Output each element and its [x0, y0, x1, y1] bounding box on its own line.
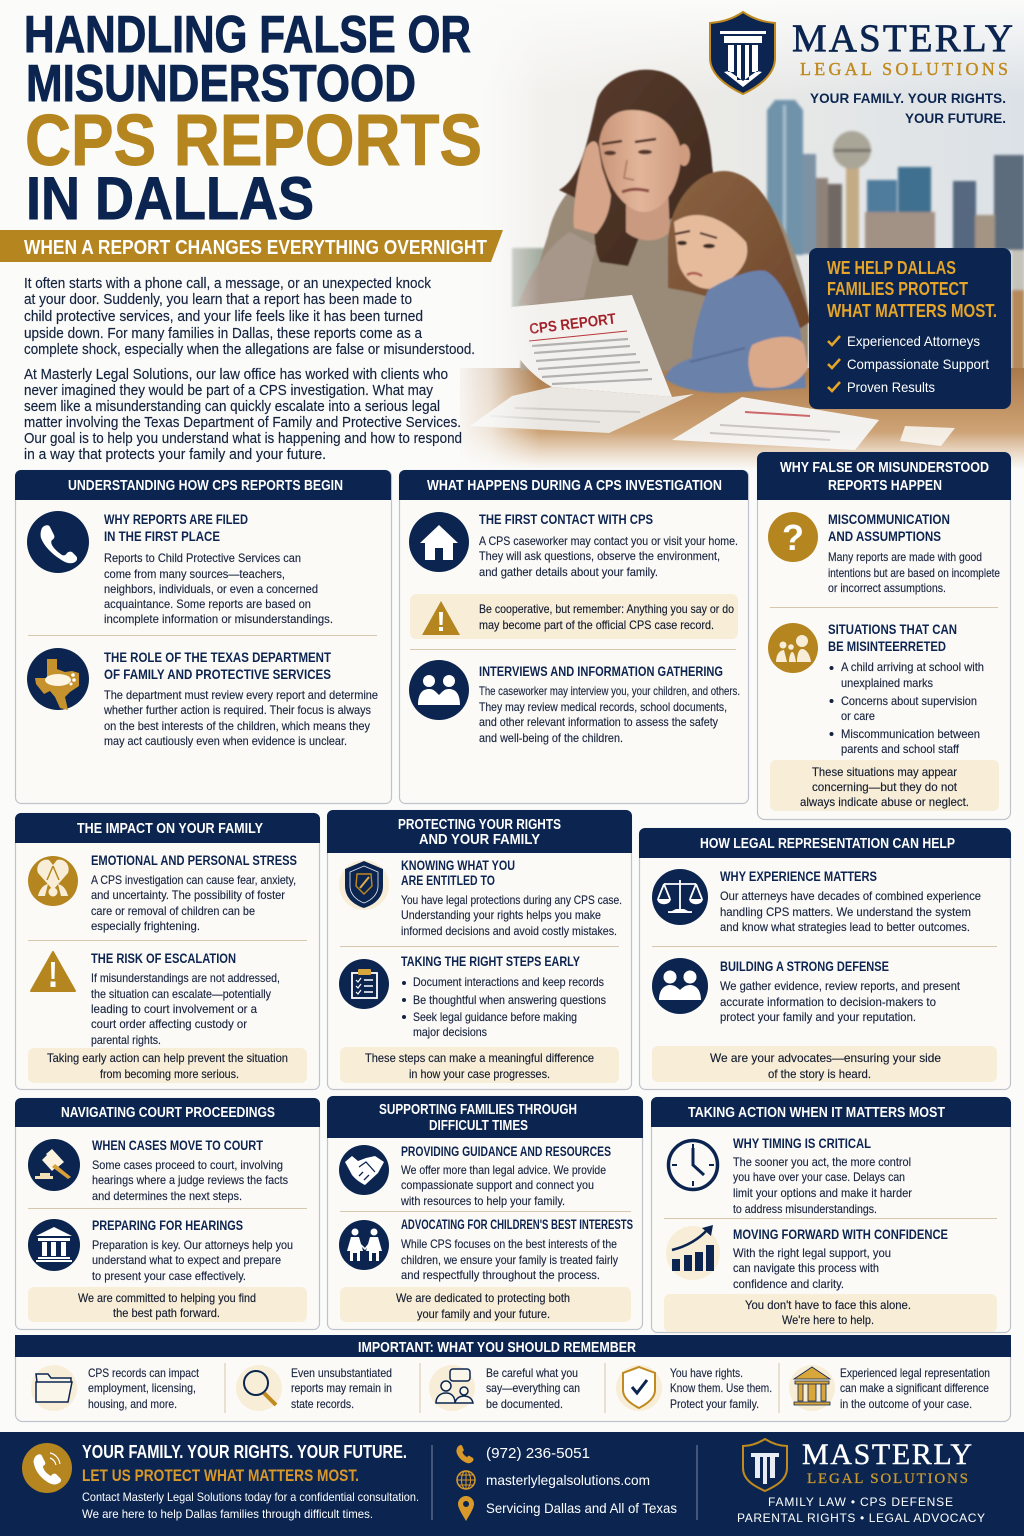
panel: navigating court proceedings: WHEN CASES MOVE TO COURT: [92, 1138, 264, 1153]
icon: parent and child: [339, 1220, 389, 1270]
footer call to action: We are here to help Dallas families through difficult times.: [82, 1507, 373, 1521]
callout: dedicated to protecting: your family and your future.: [417, 1307, 550, 1321]
intro paragraph 1: at your door. Suddenly, you learn that a report has been made to: [24, 292, 412, 308]
tagline: YOUR FAMILY. YOUR RIGHTS.: [810, 91, 1006, 106]
icon: handshake: [339, 1145, 389, 1195]
tagline: [810, 91, 1006, 126]
panel: understanding how CPS reports begin: [15, 470, 392, 804]
reminder: CPS records: [31, 1365, 200, 1411]
callout: be cooperative: Be cooperative, but remember: Anything you say or do: [479, 602, 734, 616]
reminder: careful what you say: Be careful what you: [486, 1366, 578, 1380]
panel: protecting your rights and your family: ARE ENTITLED TO: [401, 873, 495, 888]
intro paragraph 2: seem like a misunderstanding can quickly escalate into a serious legal: [24, 399, 440, 415]
panel: what happens during a CPS investigation: The caseworker may interview you, your children, and others.: [479, 684, 740, 698]
reminder: legal representation: can make a significant difference: [840, 1381, 989, 1395]
panel: supporting families through difficult times: and respectfully throughout the process.: [401, 1268, 600, 1282]
contact details: masterlylegalsolutions.com: [486, 1472, 650, 1488]
callout: we help Dallas families: FAMILIES PROTECT: [827, 279, 968, 299]
ribbon subtitle: WHEN A REPORT CHANGES EVERYTHING OVERNIGHT: [24, 236, 487, 259]
panel: navigating court proceedings: PREPARING FOR HEARINGS: [92, 1218, 243, 1233]
callout: you don't have to face this alone: [664, 1294, 997, 1332]
callout: be cooperative: may become part of the official CPS case record.: [479, 618, 714, 632]
panel: protecting your rights and your family: AND YOUR FAMILY: [419, 832, 540, 848]
reminder: careful what you say: say—everything can: [486, 1381, 580, 1395]
panel: how legal representation can help: handling CPS matters. We understand the system: [720, 905, 971, 919]
panel: understanding how CPS reports begin: acquaintance. Some reports are based on: [104, 597, 311, 611]
callout: be cooperative: [410, 594, 738, 639]
callout: we help Dallas families: Compassionate Support: [847, 356, 989, 372]
reminder: legal representation: Experienced legal representation: [840, 1366, 990, 1380]
reminder: you have rights: [616, 1365, 772, 1411]
reminder: careful what you say: [429, 1365, 580, 1411]
intro paragraph 2: matter involving the Texas Department of Family and Protective Services.: [24, 415, 461, 431]
panel: taking action when it matters most: MOVING FORWARD WITH CONFIDENCE: [733, 1227, 948, 1242]
intro paragraph 1: upside down. For many families in Dallas, these reports come as a: [24, 326, 422, 342]
icon: gavel: [28, 1139, 80, 1191]
panel: the impact on your family: If misunderstandings are not addressed,: [91, 971, 280, 985]
icon: people defense: [652, 958, 708, 1014]
panel: navigating court proceedings: understand what to expect and prepare: [92, 1253, 281, 1267]
panel: the impact on your family: EMOTIONAL AND PERSONAL STRESS: [91, 853, 297, 868]
callout: committed to helping: [28, 1287, 307, 1322]
panel: taking action when it matters most: limit your options and make it harder: [733, 1186, 912, 1200]
panel: how legal representation can help: [639, 828, 1011, 1090]
hand: [574, 141, 611, 234]
icon: people interview: [409, 660, 469, 720]
panel: supporting families through difficult times: We offer more than legal advice. We provide: [401, 1163, 606, 1177]
icon: rising chart: [666, 1225, 720, 1280]
footer logo: LEGAL SOLUTIONS: [807, 1471, 968, 1487]
face: [599, 110, 681, 212]
panel: understanding how CPS reports begin: OF FAMILY AND PROTECTIVE SERVICES: [104, 667, 331, 682]
panel: protecting your rights and your family: TAKING THE RIGHT STEPS EARLY: [401, 954, 580, 969]
child face: [674, 215, 747, 289]
panel: taking action when it matters most: can navigate this process with: [733, 1261, 879, 1275]
panel: the impact on your family: and uncertainty. The possibility of foster: [91, 888, 285, 902]
callout: situations may appear concerning: These situations may appear: [812, 765, 957, 779]
panel: the impact on your family: the situation can escalate—potentially: [91, 987, 271, 1001]
panel: taking action when it matters most: With the right legal support, you: [733, 1246, 891, 1260]
footer logo: PARENTAL RIGHTS • LEGAL ADVOCACY: [737, 1511, 985, 1525]
callout: committed to helping: We are committed to helping you find: [78, 1291, 256, 1305]
tagline: YOUR FUTURE.: [905, 111, 1006, 126]
callout: meaningful difference: [340, 1047, 619, 1083]
callout: we help Dallas families: [809, 248, 1011, 409]
reminder: legal representation: [789, 1365, 990, 1411]
panel: why false or misunderstood reports happen: SITUATIONS THAT CAN: [828, 622, 957, 637]
icon: scales of justice: [652, 869, 708, 925]
panel: why false or misunderstood reports happen: or incorrect assumptions.: [828, 581, 946, 595]
panel: navigating court proceedings: Preparation is key. Our attorneys help you: [92, 1238, 293, 1252]
reminder: unsubstantiated reports: reports may remain in: [291, 1381, 392, 1395]
panel: what happens during a CPS investigation: A CPS caseworker may contact you or visit your home.: [479, 534, 738, 548]
panel: navigating court proceedings: and determines the next steps.: [92, 1189, 242, 1203]
panel: the impact on your family: THE RISK OF ESCALATION: [91, 951, 236, 966]
footer call to action: YOUR FAMILY. YOUR RIGHTS. YOUR FUTURE.: [82, 1442, 407, 1462]
intro paragraph 2: [24, 367, 462, 463]
panel: supporting families through difficult times: with resources to help your family.: [400, 1194, 565, 1208]
panel: the impact on your family: THE IMPACT ON YOUR FAMILY: [77, 821, 263, 837]
reminder: unsubstantiated reports: state records.: [291, 1397, 354, 1411]
icon: family silhouettes: [768, 623, 818, 673]
panel: how legal representation can help: protect your family and your reputation.: [720, 1010, 916, 1024]
panel: protecting your rights and your family: Understanding your rights helps you make: [401, 908, 601, 922]
intro paragraph 2: At Masterly Legal Solutions, our law office has worked with clients who: [24, 367, 448, 383]
icon: clock: [668, 1140, 718, 1190]
panel: protecting your rights and your family: Be thoughtful when answering questions: [413, 993, 606, 1007]
icon: question mark: [768, 512, 818, 562]
panel: understanding how CPS reports begin: come from many sources—teachers,: [104, 567, 285, 581]
footer call to action: Contact Masterly Legal Solutions today for a confidential consultation.: [82, 1490, 419, 1504]
callout: situations may appear concerning: [770, 760, 999, 811]
callout: your advocates: [652, 1046, 997, 1082]
icon: shield: [339, 860, 389, 910]
panel: taking action when it matters most: TAKING ACTION WHEN IT MATTERS MOST: [688, 1105, 945, 1121]
callout: you don't have to face this alone: We're here to help.: [782, 1313, 874, 1327]
panel: why false or misunderstood reports happen: A child arriving at school with: [841, 660, 984, 674]
panel: protecting your rights and your family: [327, 810, 632, 1090]
panel: why false or misunderstood reports happen: Many reports are made with good: [828, 550, 982, 564]
panel: understanding how CPS reports begin: Reports to Child Protective Services can: [104, 551, 301, 565]
panel: the impact on your family: especially frightening.: [91, 919, 200, 933]
panel: how legal representation can help: accurate information to decision-makers to: [720, 995, 936, 1009]
intro paragraph 1: It often starts with a phone call, a message, or an unexpected knock: [24, 276, 432, 292]
panel: why false or misunderstood reports happen: WHY FALSE OR MISUNDERSTOOD: [780, 460, 989, 476]
panel: understanding how CPS reports begin: whether further action is required. Their focus is always: [103, 703, 371, 717]
callout: we help Dallas families: Proven Results: [847, 379, 935, 395]
ribbon subtitle: [0, 230, 503, 262]
panel: understanding how CPS reports begin: WHY REPORTS ARE FILED: [104, 512, 248, 527]
icon: broken heart family: [28, 856, 78, 906]
panel: understanding how CPS reports begin: IN THE FIRST PLACE: [104, 529, 220, 544]
panel: why false or misunderstood reports happen: BE MISINTEERRETED: [828, 639, 946, 654]
panel: protecting your rights and your family: Seek legal guidance before making: [413, 1010, 577, 1024]
callout: committed to helping: the best path forward.: [113, 1306, 220, 1320]
panel: supporting families through difficult times: compassionate support and connect you: [401, 1178, 594, 1192]
panel: supporting families through difficult times: children, we ensure your family is treated fairly: [401, 1253, 618, 1267]
footer logo: FAMILY LAW • CPS DEFENSE: [768, 1495, 953, 1509]
hair behind: [559, 70, 716, 266]
panel: understanding how CPS reports begin: The department must review every report and determine: [104, 688, 378, 702]
panel: how legal representation can help: WHY EXPERIENCE MATTERS: [720, 869, 877, 884]
panel: understanding how CPS reports begin: on the best interests of the children, which means they: [104, 719, 370, 733]
panel: taking action when it matters most: [651, 1097, 1011, 1332]
title: IN DALLAS: [26, 165, 314, 232]
panel: supporting families through difficult times: [327, 1096, 643, 1330]
logo: Masterly Legal Solutions: LEGAL SOLUTIONS: [800, 59, 1008, 79]
callout: your advocates: We are your advocates—ensuring your side: [710, 1051, 941, 1065]
panel: why false or misunderstood reports happen: AND ASSUMPTIONS: [828, 529, 941, 544]
title: MISUNDERSTOOD: [26, 55, 416, 113]
panel: what happens during a CPS investigation: and gather details about your family.: [479, 565, 658, 579]
panel: how legal representation can help: HOW LEGAL REPRESENTATION CAN HELP: [700, 836, 955, 852]
panel: protecting your rights and your family: PROTECTING YOUR RIGHTS: [398, 817, 561, 833]
panel: important, what you should remember: [15, 1335, 1011, 1422]
intro paragraph 2: never imagined they would be part of a CPS investigation. What may: [24, 383, 434, 399]
child shirt: [665, 271, 806, 393]
contact details: Servicing Dallas and All of Texas: [486, 1500, 677, 1516]
icon: phone: [27, 511, 89, 573]
panel: the impact on your family: A CPS investigation can cause fear, anxiety,: [91, 873, 296, 887]
sleeve: [518, 232, 596, 305]
panel: supporting families through difficult times: DIFFICULT TIMES: [429, 1118, 528, 1134]
callout: dedicated to protecting: We are dedicated to protecting both: [396, 1291, 570, 1305]
icon: warning triangle: [31, 952, 75, 991]
callout: meaningful difference: These steps can make a meaningful difference: [365, 1051, 594, 1065]
footer call to action: [82, 1442, 419, 1521]
panel: how legal representation can help: Our atterneys have decades of combined experience: [720, 889, 981, 903]
panel: supporting families through difficult times: While CPS focuses on the best interests of the: [401, 1237, 617, 1251]
panel: the impact on your family: court order affecting custody or: [91, 1017, 247, 1031]
panel: supporting families through difficult times: SUPPORTING FAMILIES THROUGH: [379, 1102, 577, 1118]
footer: [0, 1432, 1024, 1536]
panel: navigating court proceedings: Some cases proceed to court, involving: [92, 1158, 283, 1172]
intro paragraph 1: child protective services, and your life feels like it has been turned: [24, 309, 423, 325]
reminder: CPS records: housing, and more.: [88, 1397, 177, 1411]
reminder: you have rights: Know them. Use them.: [670, 1381, 772, 1395]
icon: clipboard checklist: [339, 959, 389, 1009]
panel: understanding how CPS reports begin: incomplete information or misunderstandings.: [104, 612, 333, 626]
panel: protecting your rights and your family: KNOWING WHAT YOU: [401, 858, 515, 873]
panel: what happens during a CPS investigation: [399, 470, 748, 804]
panel: what happens during a CPS investigation: They will ask questions, observe the environment,: [479, 549, 720, 563]
panel: what happens during a CPS investigation: WHAT HAPPENS DURING A CPS INVESTIGATION: [427, 478, 722, 494]
reminder: CPS records: CPS records can impact: [88, 1366, 200, 1380]
hero photo: mother and child on the phone with a CPS report and Dallas skyline: [450, 0, 1024, 470]
reminder: careful what you say: be documented.: [486, 1397, 563, 1411]
panel: supporting families through difficult times: ADVOCATING FOR CHILDREN'S BEST INTERESTS: [401, 1217, 633, 1232]
panel: the impact on your family: parental rights.: [91, 1033, 161, 1047]
panel: what happens during a CPS investigation: INTERVIEWS AND INFORMATION GATHERING: [479, 664, 723, 679]
panel: why false or misunderstood reports happen: MISCOMMUNICATION: [828, 512, 950, 527]
panel: understanding how CPS reports begin: neighbors, individuals, or even a concerned: [104, 582, 318, 596]
logo: Masterly Legal Solutions: [710, 12, 1013, 94]
callout: early action: [28, 1048, 307, 1083]
icon: question mark: ?: [782, 517, 804, 558]
neck: [626, 190, 670, 240]
intro paragraph 2: in a way that protects your family and your future.: [24, 447, 326, 463]
panel: taking action when it matters most: to address misunderstandings.: [733, 1202, 877, 1216]
sweater: [520, 180, 808, 372]
mother hand: [748, 337, 808, 388]
panel: the impact on your family: leading to court involvement or a: [91, 1002, 257, 1016]
child hair: [668, 171, 810, 335]
callout: we help Dallas families: Experienced Attorneys: [847, 333, 980, 349]
panel: important, what you should remember: IMPORTANT: WHAT YOU SHOULD REMEMBER: [358, 1340, 636, 1356]
callout: situations may appear concerning: always indicate abuse or neglect.: [800, 795, 969, 809]
callout: early action: Taking early action can help prevent the situation: [47, 1051, 288, 1065]
panel: protecting your rights and your family: Document interactions and keep records: [413, 975, 604, 989]
title: CPS REPORTS: [25, 101, 482, 181]
panel: the impact on your family: care or removal of children can be: [91, 904, 255, 918]
intro paragraph 2: Our goal is to help you understand what is happening and how to respond: [24, 431, 462, 447]
reminder: you have rights: You have rights.: [670, 1366, 743, 1380]
reminder: you have rights: Protect your family.: [670, 1397, 759, 1411]
panel: protecting your rights and your family: major decisions: [413, 1025, 487, 1039]
panel: how legal representation can help: BUILDING A STRONG DEFENSE: [720, 959, 889, 974]
panel: what happens during a CPS investigation: and well-being of the children.: [479, 731, 623, 745]
contact details: [456, 1445, 677, 1521]
panel: protecting your rights and your family: You have legal protections during any CPS case.: [401, 893, 622, 907]
panel: navigating court proceedings: NAVIGATING COURT PROCEEDINGS: [61, 1105, 275, 1121]
logo: Masterly Legal Solutions: MASTERLY: [792, 17, 1013, 60]
reminder: legal representation: in the outcome of your case.: [840, 1397, 972, 1411]
icon: house: [409, 512, 469, 572]
panel: taking action when it matters most: WHY TIMING IS CRITICAL: [733, 1136, 871, 1151]
panel: why false or misunderstood reports happen: [757, 452, 1011, 820]
panel: taking action when it matters most: The sooner you act, the more control: [733, 1155, 911, 1169]
panel: why false or misunderstood reports happen: or care: [841, 709, 875, 723]
panel: protecting your rights and your family: informed decisions and avoid costly mistakes.: [401, 924, 617, 938]
panel: what happens during a CPS investigation: THE FIRST CONTACT WITH CPS: [479, 512, 653, 527]
callout: meaningful difference: in how your case progresses.: [409, 1067, 550, 1081]
title: [24, 6, 482, 232]
panel: navigating court proceedings: [15, 1098, 320, 1330]
icon: footer phone: [22, 1443, 72, 1493]
contact details: (972) 236-5051: [486, 1445, 590, 1462]
panel: understanding how CPS reports begin: THE ROLE OF THE TEXAS DEPARTMENT: [104, 650, 332, 665]
panel: taking action when it matters most: confidence and clarity.: [733, 1277, 844, 1291]
panel: why false or misunderstood reports happen: Miscommunication between: [841, 727, 980, 741]
reminder: unsubstantiated reports: Even unsubstantiated: [291, 1366, 392, 1380]
title: HANDLING FALSE OR: [24, 6, 471, 64]
reminder: CPS records: employment, licensing,: [88, 1381, 196, 1395]
panel: why false or misunderstood reports happen: parents and school staff: [841, 742, 960, 756]
callout: early action: from becoming more serious.: [100, 1067, 239, 1081]
panel: why false or misunderstood reports happen: REPORTS HAPPEN: [828, 478, 942, 494]
callout: your advocates: of the story is heard.: [768, 1067, 871, 1081]
panel: the impact on your family: [15, 813, 320, 1090]
panel: why false or misunderstood reports happen: Concerns about supervision: [841, 694, 977, 708]
panel: navigating court proceedings: hearings where a judge reviews the facts: [92, 1173, 288, 1187]
intro paragraph 1: complete shock, especially when the allegations are false or misunderstood.: [24, 342, 475, 358]
panel: how legal representation can help: and know what strategies lead to better outcomes.: [720, 920, 970, 934]
icon: Texas map: [27, 648, 89, 710]
reminder: unsubstantiated reports: [236, 1365, 392, 1411]
callout: you don't have to face this alone: You don't have to face this alone.: [745, 1298, 911, 1312]
panel: why false or misunderstood reports happen: unexplained marks: [841, 676, 933, 690]
footer logo: MASTERLY: [802, 1438, 972, 1471]
panel: navigating court proceedings: to present your case effectively.: [92, 1269, 246, 1283]
hero photo: mother and child on the phone with a CPS report and Dallas skyline: CPS REPORT: [528, 310, 617, 338]
phone: [593, 165, 608, 198]
panel: what happens during a CPS investigation: and other relevant information to assess the safety: [479, 715, 718, 729]
panel: understanding how CPS reports begin: may act cautiously even when evidence is unclear.: [104, 734, 347, 748]
report paper: [512, 295, 672, 397]
callout: dedicated to protecting: [340, 1287, 631, 1322]
callout: we help Dallas families: WE HELP DALLAS: [827, 258, 956, 278]
footer call to action: LET US PROTECT WHAT MATTERS MOST.: [82, 1466, 359, 1485]
icon: courthouse: [28, 1219, 80, 1271]
panel: how legal representation can help: We gather evidence, review reports, and present: [720, 979, 961, 993]
panel: what happens during a CPS investigation: They may review medical records, school documents,: [479, 700, 727, 714]
intro paragraph 1: [24, 276, 475, 358]
footer logo: [737, 1438, 985, 1525]
panel: understanding how CPS reports begin: UNDERSTANDING HOW CPS REPORTS BEGIN: [68, 478, 343, 494]
callout: situations may appear concerning: concerning—but they do not: [812, 780, 958, 794]
panel: supporting families through difficult times: PROVIDING GUIDANCE AND RESOURCES: [401, 1144, 611, 1159]
panel: taking action when it matters most: you have over your case. Delays can: [733, 1170, 905, 1184]
